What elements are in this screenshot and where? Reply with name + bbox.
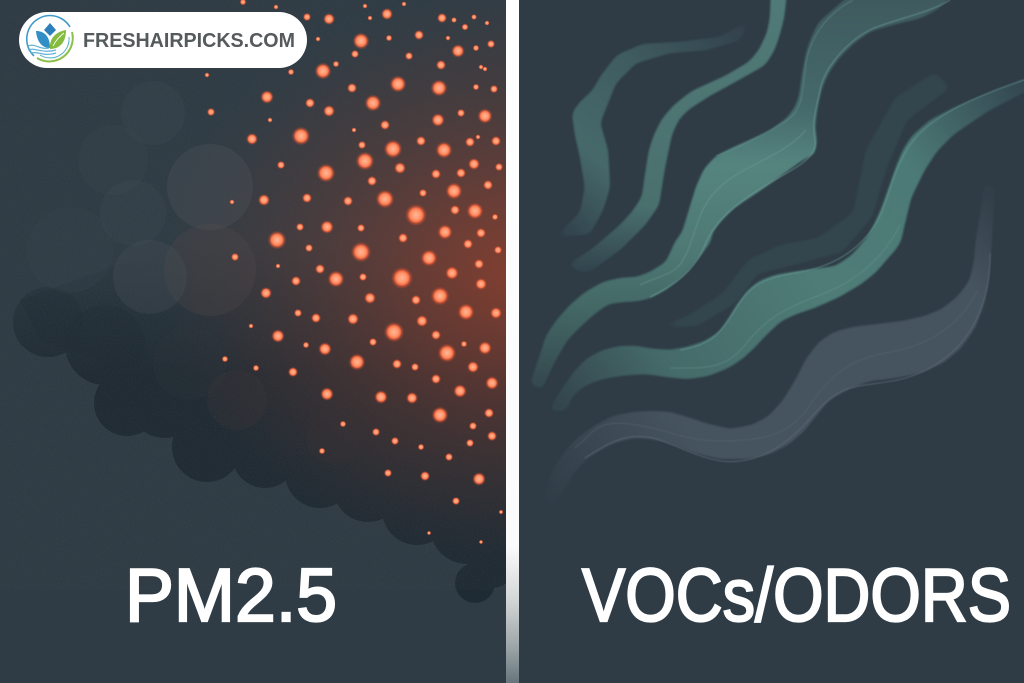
wave: central large band (530, 0, 955, 390)
divider (506, 0, 519, 683)
badge pill (19, 12, 307, 68)
heading: PM2.5: PM2.5 (125, 553, 337, 637)
wave: faint branch (655, 72, 950, 328)
website name: FRESHAIRPICKS.COM (83, 30, 295, 52)
wave: far left wisp (555, 20, 750, 237)
wave: second band (566, 0, 787, 273)
film grain (0, 0, 506, 590)
lighter smoke puffs (27, 81, 360, 464)
wave edge highlights (575, 0, 1024, 462)
red glow behind particles (165, 0, 506, 595)
panel: VOCs/Odors (519, 0, 1024, 683)
smoke cloud dark base (13, 235, 515, 603)
panel background (519, 0, 1024, 683)
panel background (0, 0, 506, 683)
panel: PM2.5 (0, 0, 515, 683)
icon: leaf and water logo (27, 16, 73, 61)
wave: grey band (540, 185, 995, 508)
wave: lower green band (548, 76, 1024, 411)
glowing particles (204, 0, 503, 544)
logo badge (19, 12, 307, 68)
